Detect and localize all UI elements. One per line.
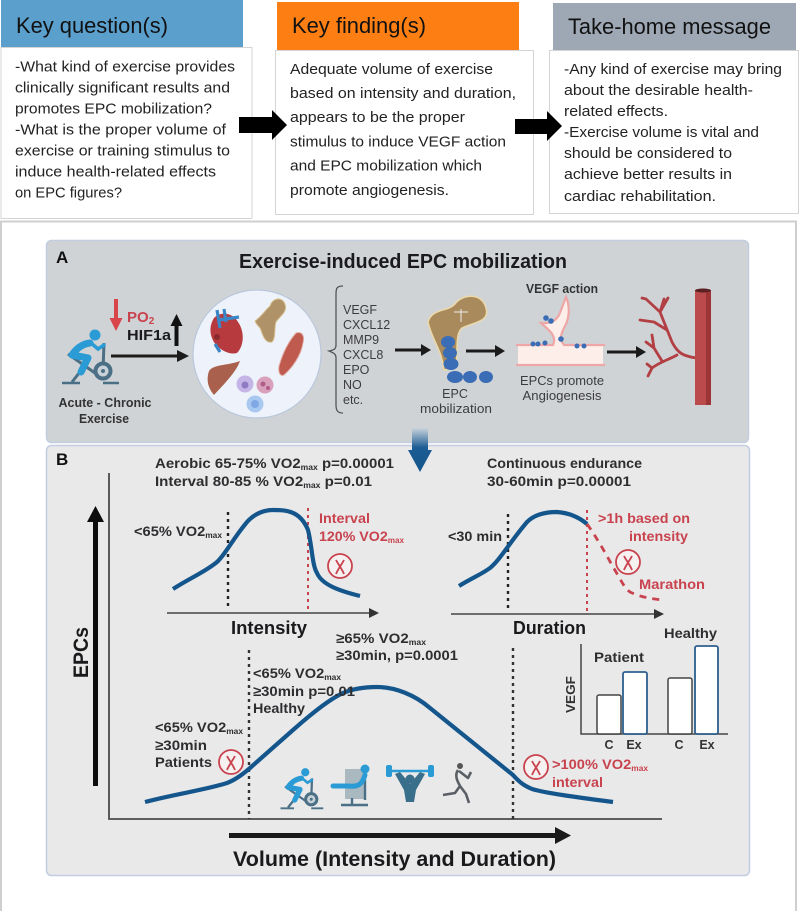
- icon: red X intensity: [328, 554, 352, 578]
- icon: liver: [208, 361, 240, 395]
- text block: mobilizing factors: [343, 303, 390, 407]
- label: interval 120 percent: [319, 510, 405, 545]
- bar: patient control: [597, 695, 621, 734]
- label: EPCs promote angiogenesis: [520, 374, 604, 403]
- label: patients: [155, 719, 244, 770]
- heading: key findings: [277, 2, 519, 50]
- panel: take-home message: [550, 3, 798, 214]
- icon: red X high interval: [524, 755, 548, 779]
- text block: key questions: clinically significant results and: [15, 80, 230, 96]
- icon: red X duration: [616, 550, 640, 574]
- brace: [329, 286, 343, 413]
- panel letter A: A: [56, 248, 68, 267]
- label: EPC mobilization: EPC: [442, 387, 468, 401]
- text block: mobilizing factors: MMP9: [343, 333, 379, 347]
- icon: runner: [443, 763, 471, 803]
- arrow: questions to findings: [239, 110, 287, 140]
- panel A title: Exercise-induced EPC mobilization: [239, 251, 567, 273]
- icon: cyclist: [280, 768, 323, 808]
- text block: mobilizing factors: CXCL8: [343, 348, 383, 362]
- heading: take-home message: Take-home message: [568, 14, 771, 39]
- label: patients: max: [226, 727, 244, 736]
- chart axes: EPCs vs volume: [109, 473, 662, 819]
- icon: bone marrow with EPCs: [428, 296, 493, 383]
- text block: take-home message: related effects.: [564, 103, 668, 120]
- text block: key questions: induce health-related effects: [15, 164, 216, 180]
- label: patients: <65% VO2: [155, 719, 223, 735]
- text block: key findings: stimulus to induce VEGF action: [290, 134, 506, 150]
- text block: key findings: and EPC mobilization which: [290, 158, 482, 174]
- label: healthy: Healthy: [253, 700, 305, 716]
- bar: patient exercise: [623, 672, 647, 734]
- icon: red down arrow PO2: [110, 299, 122, 331]
- icon: exercise bike: [62, 330, 119, 383]
- bar: healthy exercise: [695, 646, 718, 734]
- arrow: sprouting to vessel: [607, 346, 646, 358]
- label: healthy: Healthy: [664, 625, 717, 641]
- text block: duration statistics: Continuous endurance: [487, 455, 642, 471]
- text block: intensity statistics: Interval 80-85 % VO2: [155, 473, 293, 489]
- label: adequate volume: ≥65% VO2: [336, 630, 404, 646]
- text block: key questions: on EPC figures?: [15, 184, 122, 202]
- bar labels: Ex: [699, 738, 715, 752]
- label: acute-chronic exercise: Acute - Chronic: [58, 396, 152, 410]
- chart: intensity curve: [134, 508, 405, 638]
- icon: pink cell: [256, 376, 274, 394]
- label: healthy: <65% VO2: [253, 665, 321, 681]
- label: adequate volume: max: [409, 638, 427, 647]
- text block: mobilizing factors: etc.: [343, 393, 363, 407]
- label: acute-chronic exercise: Exercise: [79, 412, 129, 426]
- label: high interval: interval: [552, 774, 603, 790]
- panel letter B: B: [56, 450, 68, 469]
- label: duration: Duration: [513, 618, 586, 638]
- text block: duration statistics: 30-60min p=0.00001: [487, 473, 631, 489]
- icon: purple cell: [236, 376, 254, 392]
- label: EPCs: EPCs: [70, 627, 93, 678]
- label: interval 120 percent: max: [388, 536, 405, 545]
- label: patients: ≥30min: [155, 737, 207, 753]
- circle: organs and tissues: [193, 290, 321, 418]
- label: intensity: Intensity: [231, 618, 307, 638]
- heading: key questions: Key question(s): [16, 13, 168, 38]
- label: VEGF axis: VEGF: [564, 676, 578, 713]
- label: below 65 percent: <65% VO2: [134, 523, 202, 539]
- label: VEGF action: VEGF action: [526, 282, 598, 296]
- text block: take-home message: -Any kind of exercise may bring: [564, 61, 782, 78]
- text block: intensity statistics: max: [303, 481, 321, 490]
- arrow: volume axis: [229, 827, 571, 844]
- text block: key questions: -What kind of exercise provides: [15, 58, 235, 76]
- icon: blue cell: [246, 396, 264, 412]
- label: EPC mobilization: [420, 387, 492, 416]
- text block: duration statistics: [487, 455, 642, 489]
- arrow: panel A to panel B: [408, 428, 432, 472]
- text block: mobilizing factors: NO: [343, 378, 362, 392]
- bar labels: C: [674, 738, 684, 752]
- label: healthy: max: [324, 673, 342, 682]
- icon: blood vessel with branches: [640, 288, 711, 405]
- chart: volume curve: [145, 630, 649, 819]
- text block: key findings: Adequate volume of exercise: [290, 61, 493, 78]
- label: marathon: Marathon: [639, 576, 705, 592]
- text block: key questions: promotes EPC mobilization?: [15, 100, 212, 118]
- label: high interval: >100% VO2: [552, 756, 628, 772]
- heading: take-home message: [553, 3, 796, 50]
- text block: mobilizing factors: EPO: [343, 363, 370, 377]
- label: acute-chronic exercise: [58, 396, 152, 426]
- chart: VEGF bar chart: [564, 625, 728, 752]
- text block: key findings: based on intensity and duration,: [290, 85, 516, 102]
- text block: take-home message: should be considered to: [564, 145, 732, 162]
- panel B: exercise volume: [46, 446, 750, 876]
- figure frame: [1, 222, 796, 911]
- panel A: exercise-induced EPC mobilization: [46, 240, 748, 442]
- label: healthy: [253, 665, 355, 716]
- text block: take-home message: achieve better results in: [564, 166, 732, 183]
- text block: intensity statistics: Aerobic 65-75% VO2: [155, 455, 291, 471]
- heading: key findings: Key finding(s): [292, 13, 426, 38]
- text block: take-home message: [550, 50, 798, 214]
- label: PO2: PO: [127, 309, 149, 326]
- text block: intensity statistics: p=0.00001: [318, 455, 394, 471]
- label: HIF1a: HIF1a: [127, 327, 172, 344]
- label: over 1h based on intensity: intensity: [629, 528, 688, 544]
- label: over 1h based on intensity: [598, 510, 690, 544]
- text block: take-home message: -Exercise volume is vital and: [564, 124, 759, 141]
- label: interval 120 percent: Interval: [319, 510, 370, 526]
- heading: key questions: [1, 0, 243, 47]
- label: interval 120 percent: 120% VO2: [319, 528, 387, 544]
- label: below 65 percent: max: [205, 531, 223, 540]
- text block: key findings: [276, 50, 534, 214]
- arrow: exercise to organs: [111, 350, 189, 362]
- label: PO2: 2: [149, 316, 155, 327]
- text block: take-home message: cardiac rehabilitation.: [564, 188, 716, 205]
- text block: intensity statistics: max: [301, 463, 318, 472]
- text block: mobilizing factors: VEGF: [343, 303, 377, 317]
- icon: muscle: [279, 333, 304, 375]
- arrow: marrow to angiogenesis: [466, 345, 505, 357]
- arrow: findings to take-home: [515, 111, 562, 141]
- label: under 30 min: <30 min: [448, 528, 502, 544]
- chart: duration curve: [448, 510, 705, 638]
- label: healthy: ≥30min p=0.01: [253, 683, 355, 699]
- label: EPCs promote angiogenesis: Angiogenesis: [522, 389, 602, 403]
- bar: healthy control: [668, 678, 692, 734]
- text block: key questions: [1, 48, 252, 218]
- icon: weightlifter: [386, 765, 434, 802]
- label: high interval: [552, 756, 649, 790]
- label: adequate volume: [336, 630, 458, 663]
- icon: vessel sprouting: [516, 297, 605, 365]
- panel: key findings: [276, 2, 534, 214]
- icon: bone: [255, 299, 286, 342]
- label: EPC mobilization: mobilization: [420, 402, 492, 416]
- text block: key questions: -What is the proper volume of: [15, 122, 227, 138]
- icon: leg press machine: [333, 764, 370, 805]
- label: EPCs promote angiogenesis: EPCs promote: [520, 374, 604, 388]
- icon: heart: [210, 309, 243, 354]
- text block: key findings: promote angiogenesis.: [290, 182, 449, 199]
- label: over 1h based on intensity: >1h based on: [598, 510, 690, 526]
- bar labels: Ex: [626, 738, 642, 752]
- bar labels: C: [604, 738, 614, 752]
- text block: mobilizing factors: CXCL12: [343, 318, 390, 332]
- text block: take-home message: about the desirable health-: [564, 82, 753, 99]
- arrow: factors to bone marrow: [395, 344, 431, 356]
- label: adequate volume: ≥30min, p=0.0001: [336, 647, 458, 663]
- text block: key findings: appears to be the proper: [290, 109, 465, 126]
- label: patients: Patients: [155, 754, 212, 770]
- arrow: EPCs axis: [87, 506, 104, 786]
- panel: key questions: [1, 0, 252, 218]
- bar labels: [604, 738, 715, 752]
- text block: intensity statistics: p=0.01: [320, 473, 372, 489]
- icon: black up arrow HIF1a: [170, 314, 182, 346]
- icon: red X patients: [219, 750, 243, 774]
- label: high interval: max: [631, 764, 649, 773]
- text block: key questions: exercise or training stimulus to: [15, 142, 230, 160]
- label: volume: Volume (Intensity and Duration): [233, 848, 556, 871]
- label: patient: Patient: [594, 649, 644, 665]
- text block: intensity statistics: [155, 455, 394, 490]
